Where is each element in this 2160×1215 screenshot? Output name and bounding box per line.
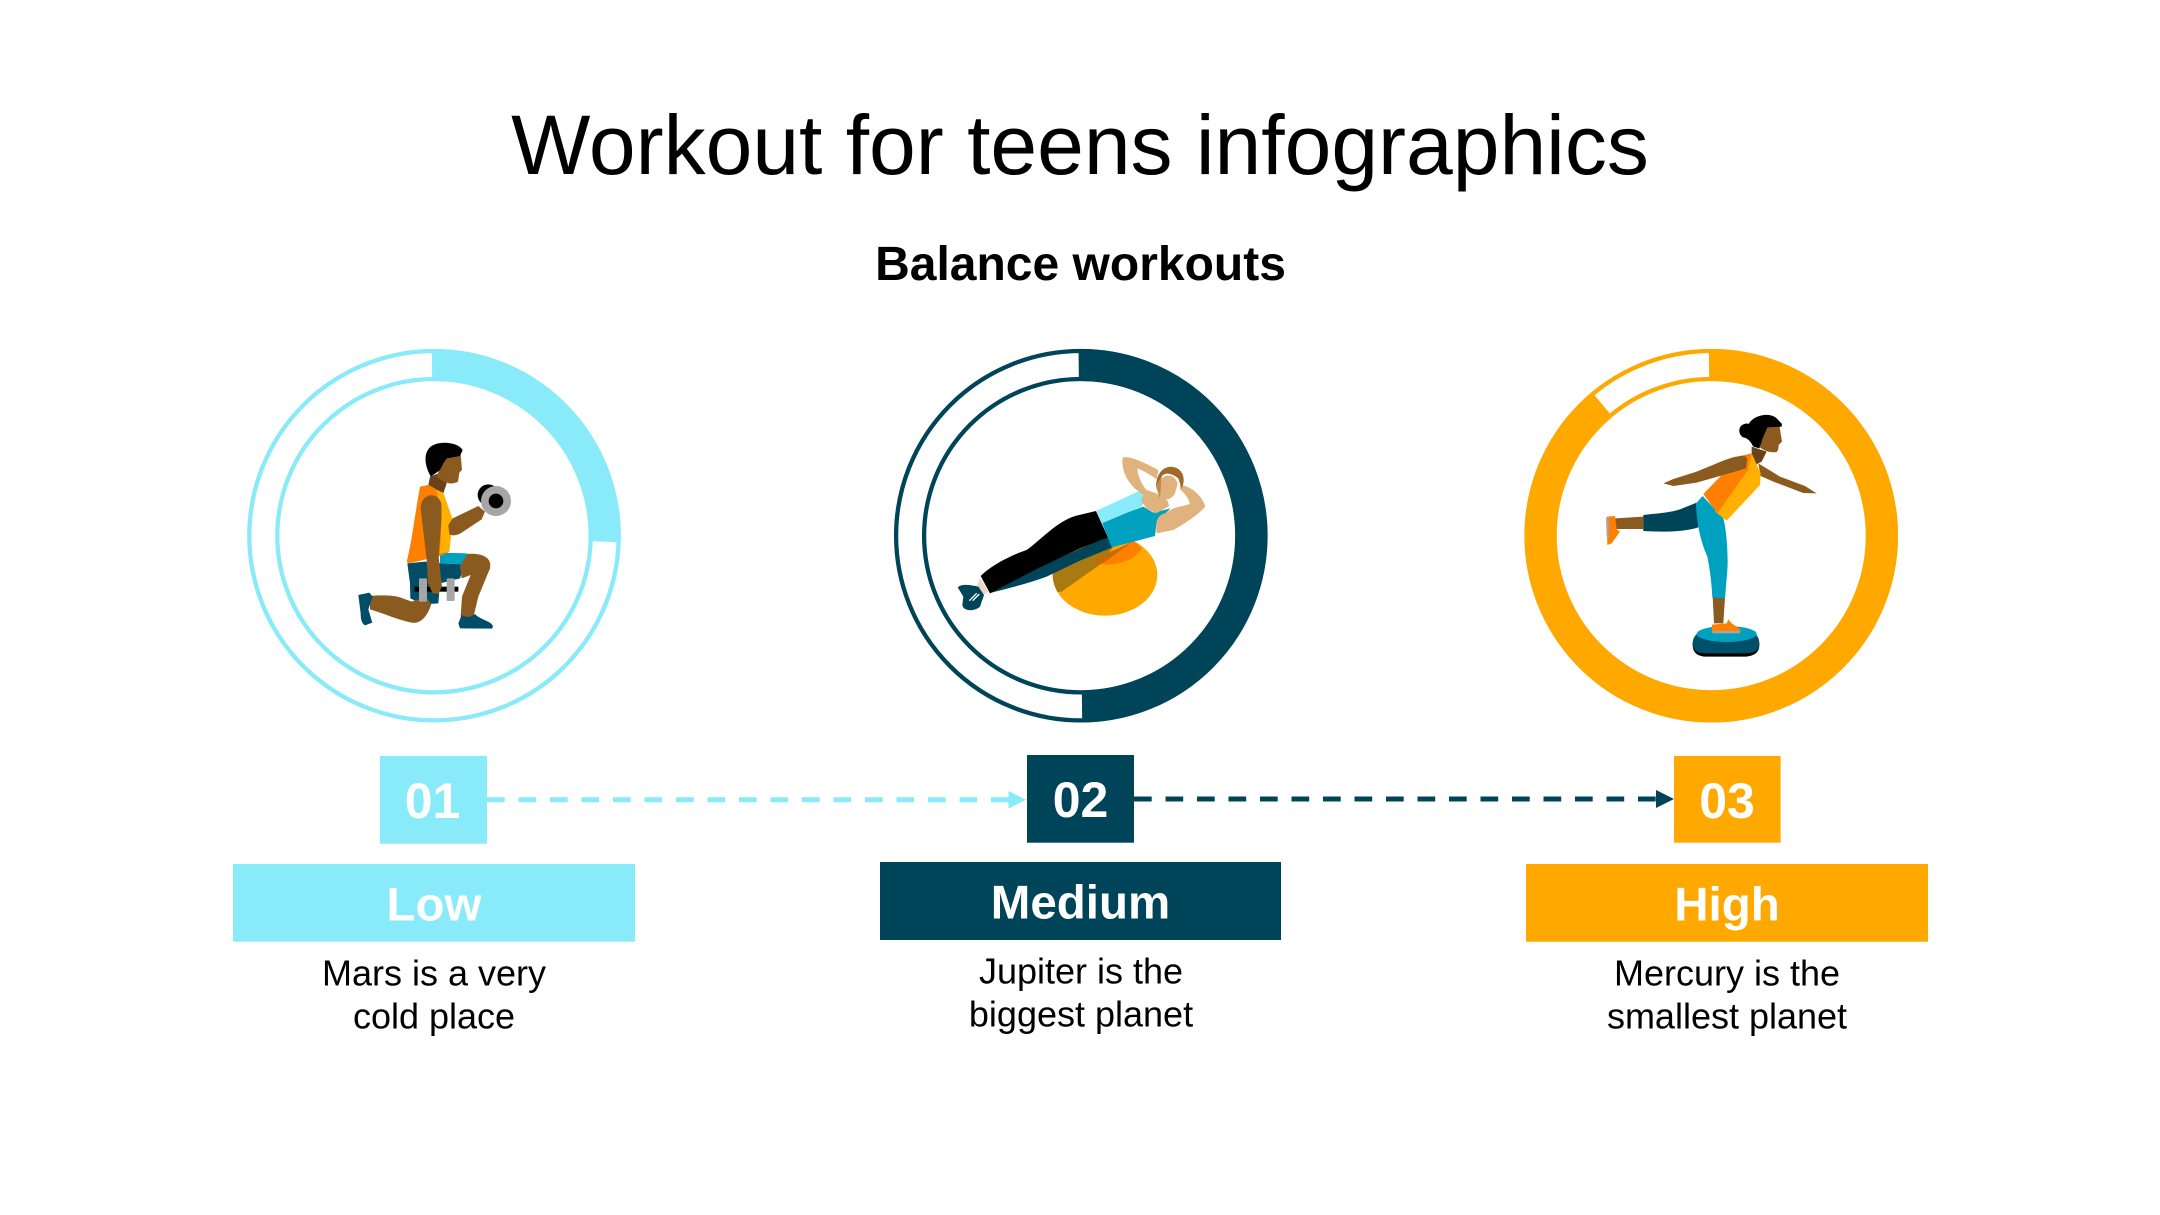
text block: Jupiter description: Jupiter is the [979, 950, 1183, 992]
panel: high intensity ring [1526, 351, 1896, 720]
arrow: 01 to 02 [487, 791, 1026, 808]
arrow: 02 to 03 [1134, 790, 1674, 808]
label bar: Medium [880, 862, 1281, 940]
title: Workout for teens infographics [511, 98, 1649, 192]
panel: low intensity ring [249, 351, 619, 720]
text block: Mercury description: Mercury is the [1614, 952, 1840, 994]
badge: 01 [380, 756, 487, 844]
label bar: Low [233, 864, 635, 942]
text block: Mars description: Mars is a very [322, 952, 546, 994]
text block: Mercury description [1607, 952, 1847, 1036]
badge: 03: 03 [1699, 773, 1755, 829]
icon: woman doing crunch on exercise ball [958, 457, 1205, 616]
text block: Jupiter description: biggest planet [969, 994, 1193, 1034]
label bar: Low: Low [387, 878, 483, 932]
label bar: Medium: Medium [991, 876, 1170, 930]
label bar: High: High [1674, 878, 1780, 932]
text block: Mercury description: smallest planet [1607, 996, 1847, 1036]
badge: 02 [1027, 755, 1134, 843]
badge: 01: 01 [405, 773, 460, 829]
icon: man doing lunge with dumbbells [358, 443, 511, 629]
subtitle: Balance workouts [875, 238, 1286, 291]
label bar: High [1526, 864, 1928, 942]
badge: 02: 02 [1053, 772, 1108, 828]
text block: Jupiter description [969, 950, 1193, 1034]
badge: 03 [1674, 756, 1781, 843]
icon: woman balancing on one leg [1606, 415, 1817, 657]
text block: Mars description [322, 952, 546, 1036]
panel: medium intensity ring [896, 351, 1266, 720]
text block: Mars description: cold place [353, 996, 515, 1036]
